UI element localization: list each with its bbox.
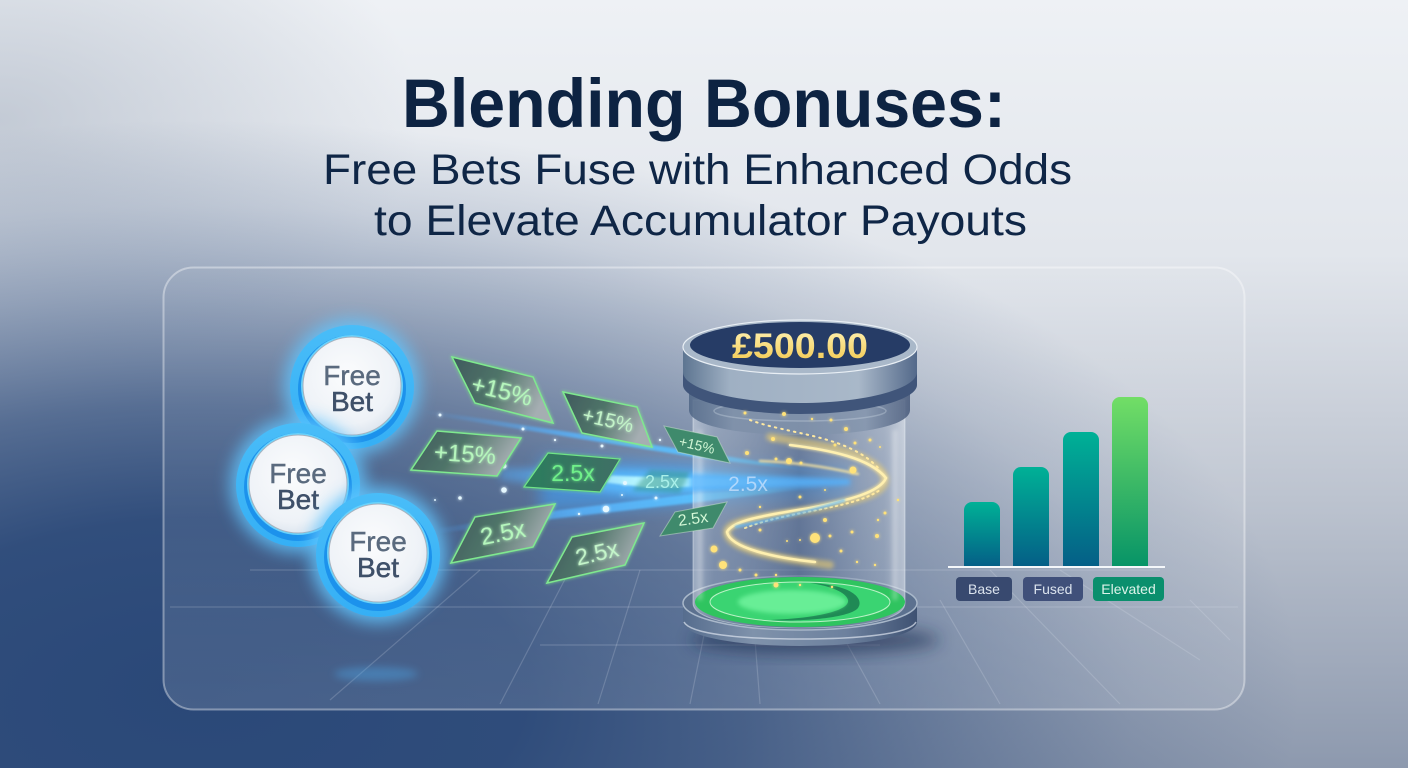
tag +15%: +15% — [433, 439, 497, 470]
tag 2.5x — [547, 523, 644, 583]
upper beam — [425, 410, 845, 475]
lid top — [683, 320, 917, 374]
tag 2.5x: 2.5x — [573, 535, 622, 571]
payout amount: £500.00 — [732, 327, 868, 366]
label Fused: Fused — [1034, 581, 1072, 597]
coin 2: Free — [269, 458, 327, 489]
faded tag +15% — [664, 426, 730, 463]
chart baseline — [948, 566, 1165, 568]
bar chart — [948, 397, 1165, 601]
tag +15%: +15% — [580, 404, 636, 438]
fusion jar — [660, 320, 940, 654]
blue swirl streak — [735, 500, 845, 527]
coin 3 — [310, 487, 446, 623]
floor glow under coins — [334, 667, 418, 681]
middle beam glow — [500, 468, 855, 496]
tag +15% — [452, 357, 553, 423]
glass highlights — [700, 430, 895, 600]
faded tag +15%: +15% — [678, 433, 716, 457]
fading tag 2.5x: 2.5x — [645, 472, 679, 492]
collar glass ring — [714, 401, 886, 421]
label Fused — [1023, 577, 1083, 601]
coin 2 — [230, 417, 366, 553]
beam halo — [540, 458, 850, 512]
heading: Blending Bonuses: — [402, 65, 1006, 142]
coin 3: Bet — [357, 552, 399, 583]
subtitle line 1: Free Bets Fuse with Enhanced Odds — [323, 146, 1072, 194]
golden swirl — [727, 420, 886, 565]
subtitle line 2: to Elevate Accumulator Payouts — [374, 197, 1027, 245]
tag 2.5x — [524, 453, 620, 492]
bar combined — [1063, 432, 1099, 566]
label Base: Base — [968, 581, 1000, 597]
label Elevated: Elevated — [1101, 581, 1156, 597]
coin 3: Free — [349, 526, 407, 557]
coin 1: Bet — [331, 386, 373, 417]
gold particles — [710, 412, 899, 588]
bar fused — [1013, 467, 1049, 566]
coin 1: Free — [323, 360, 381, 391]
dissolving 2.5x: 2.5x — [728, 473, 768, 496]
odds tags — [411, 357, 690, 583]
faded tag 2.5x: 2.5x — [677, 509, 709, 530]
label Base — [956, 577, 1012, 601]
jar floor shadow — [690, 626, 940, 654]
perspective floor grid — [170, 560, 1238, 704]
tag +15% — [563, 392, 652, 447]
collar — [689, 385, 910, 435]
faded tag 2.5x — [660, 502, 727, 536]
jar base — [683, 576, 917, 646]
title block — [323, 65, 1072, 245]
middle beam core — [520, 472, 845, 488]
fading tag 2.5x — [632, 470, 690, 493]
energy beams — [425, 410, 855, 533]
lower beam — [440, 484, 845, 533]
coin 2: Bet — [277, 484, 319, 515]
label Elevated — [1093, 577, 1164, 601]
lid dark display — [690, 322, 910, 368]
tag +15%: +15% — [469, 371, 535, 412]
lid lower dark band — [683, 372, 917, 414]
tag 2.5x — [451, 504, 555, 563]
beam inside jar — [690, 474, 850, 492]
beam sparkles — [434, 414, 661, 515]
coin 1 — [284, 319, 420, 455]
bar base — [964, 502, 1000, 566]
tag +15% — [411, 431, 521, 476]
bar elevated — [1112, 397, 1148, 566]
free bet coins — [230, 319, 446, 623]
glass panel — [164, 268, 1244, 710]
green platform — [695, 577, 905, 627]
glass cylinder — [693, 400, 905, 628]
tag 2.5x: 2.5x — [551, 460, 595, 486]
tag 2.5x: 2.5x — [478, 516, 528, 551]
lid side — [683, 347, 917, 405]
